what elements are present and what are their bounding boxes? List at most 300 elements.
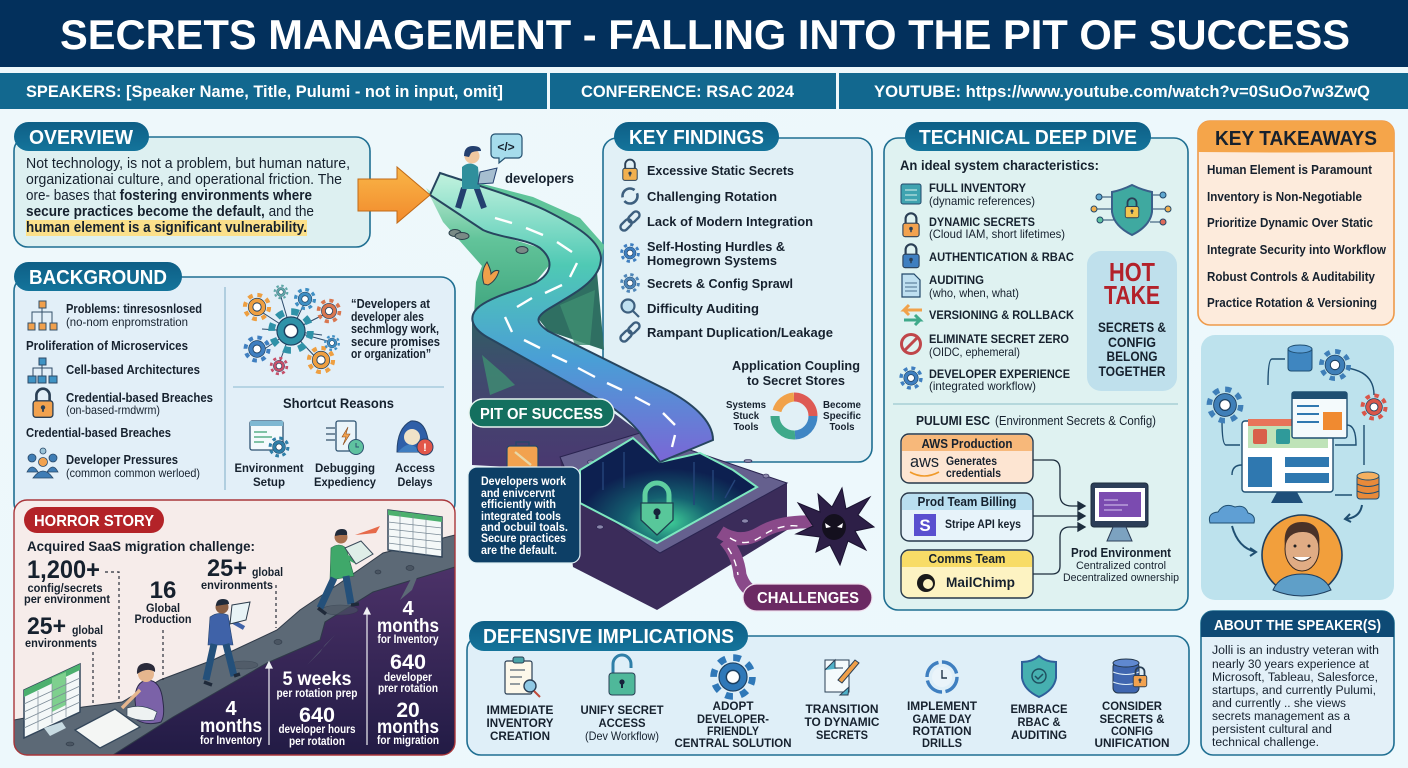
overview text: ore- bases that fostering environments where — [26, 188, 312, 204]
callout: hot take: BELONG — [1106, 348, 1158, 364]
icon: orange database — [1357, 472, 1379, 499]
item: auditing — [929, 273, 1019, 300]
icon: gear 2 — [622, 275, 638, 291]
text: microservices: Proliferation of Microservices — [26, 338, 188, 353]
takeaways list: Human Element is Paramount — [1207, 163, 1373, 177]
technical heading: TECHNICAL DEEP DIVE — [919, 127, 1137, 149]
finding 4: Self-Hosting Hurdles & — [647, 239, 785, 254]
challenge paths — [720, 522, 812, 592]
label: environment setup: Environment — [234, 461, 304, 475]
about text: startups, and currently Pulumi, — [1212, 685, 1376, 697]
text box: developers work: integrated tools — [481, 509, 561, 523]
stat: right column: developer — [384, 672, 432, 684]
figure: stairs climber — [318, 529, 373, 614]
arrows: timeline — [266, 608, 370, 745]
item: rbac: RBAC & — [1018, 715, 1061, 729]
text: credential breaches: (on-based-rmdwrm) — [66, 403, 160, 417]
stat: 16 production: Production — [134, 612, 192, 626]
finding 2: Challenging Rotation — [647, 189, 777, 204]
horror heading: HORROR STORY — [34, 513, 154, 530]
icon: document — [902, 274, 920, 297]
label: access delays: Delays — [398, 475, 433, 489]
title: SECRETS MANAGEMENT - FALLING INTO THE PIT OF SUCCESS — [60, 11, 1350, 58]
background heading: BACKGROUND — [29, 267, 167, 289]
item: auditing: (who, when, what) — [929, 286, 1019, 300]
item: game day — [907, 699, 978, 750]
item: unification: CONSIDER — [1102, 699, 1162, 713]
icon: monster — [796, 488, 874, 565]
panel: horror story — [14, 500, 455, 755]
item: unification: UNIFICATION — [1094, 736, 1170, 750]
panel: key takeaways — [1198, 121, 1394, 325]
icon: inventory — [901, 184, 921, 204]
text: problems: Problems: tinresosnlosed — [66, 301, 202, 316]
panel: speaker illustration — [1201, 335, 1394, 600]
stat: right column: months — [377, 717, 439, 738]
stat: 16 production — [134, 577, 192, 626]
label: prod environment: Centralized control — [1076, 560, 1166, 572]
speech bubble: </> — [497, 140, 515, 154]
callout: hot take — [1087, 251, 1177, 391]
text: subhead: Acquired SaaS migration challenge: — [27, 538, 255, 554]
heading: application coupling: Application Coupling — [732, 358, 860, 373]
road — [430, 173, 713, 462]
takeaways list: Inventory is Non-Negotiable — [1207, 190, 1362, 204]
item: transition: SECRETS — [816, 728, 868, 742]
item: immediate inventory: INVENTORY — [486, 716, 554, 730]
panel: key findings — [603, 122, 872, 462]
illustration: mountain path — [14, 535, 455, 755]
text: problems — [66, 301, 202, 329]
box: prod team billing: S — [919, 516, 931, 535]
icon: overlay window — [1292, 392, 1347, 438]
icon: dev gear — [901, 368, 921, 388]
item: full inventory: (dynamic references) — [929, 194, 1035, 208]
icon: open lock — [609, 655, 635, 695]
item: immediate inventory: CREATION — [490, 729, 550, 743]
text box: developers work: and enivcervnt — [481, 486, 555, 500]
stat: 1200 config — [24, 556, 110, 606]
stat: 1200 config: 1,200+ — [27, 556, 100, 584]
arrows to portrait — [1232, 505, 1362, 556]
text: quote: “Developers at — [351, 297, 431, 311]
item: developer experience — [929, 367, 1070, 393]
developer figure — [458, 146, 497, 208]
youtube bar: YOUTUBE: https://www.youtube.com/watch?v=0SuOo7w3ZwQ — [874, 82, 1370, 101]
item: auditing: AUDITING — [929, 273, 984, 287]
about text: technical challenge. — [1212, 737, 1319, 749]
label: systems stuck tools: Stuck — [733, 410, 759, 422]
item: dynamic secrets: DYNAMIC SECRETS — [929, 215, 1035, 229]
about text: persistent cultural and — [1212, 724, 1332, 736]
key findings heading — [614, 122, 779, 151]
item: adopt: DEVELOPER- — [697, 712, 769, 726]
stat: rotation prep — [276, 669, 358, 748]
icon: environment setup — [250, 421, 288, 456]
box: prod team billing: Prod Team Billing — [918, 494, 1017, 509]
item: immediate inventory — [486, 703, 554, 743]
stat: 25 global left: global — [72, 623, 103, 637]
item: rbac: EMBRACE — [1010, 702, 1068, 716]
arrows to prod — [1033, 460, 1085, 574]
item: unification: CONFIG — [1111, 724, 1153, 738]
horror heading — [24, 507, 164, 533]
label: systems stuck tools — [726, 399, 766, 433]
pit block — [560, 433, 787, 610]
stat: months inventory — [200, 698, 263, 747]
label: become specific tools: Become — [823, 399, 861, 411]
stat: rotation prep: 5 weeks — [282, 669, 352, 690]
callout: hot take: HOT — [1109, 257, 1155, 287]
stat: rotation prep: developer hours — [278, 724, 356, 736]
icon: org tree blue — [28, 358, 57, 383]
box: aws production: Generates — [946, 454, 997, 468]
stat: right column: prer rotation — [378, 683, 438, 695]
label: prod environment — [1063, 546, 1179, 584]
icon: access delays: ! — [423, 442, 427, 454]
icon: toolbox — [507, 442, 538, 470]
icon: gear — [622, 245, 638, 261]
item: rbac — [1010, 702, 1068, 742]
icon: rotation — [622, 188, 638, 204]
overview text: organizationai culture, and operational friction. The — [26, 172, 342, 188]
icon: orange lock — [903, 213, 919, 237]
callout: hot take: SECRETS & — [1098, 319, 1166, 335]
about text — [1212, 645, 1379, 749]
icon: database — [1288, 345, 1312, 371]
takeaways heading — [1198, 121, 1394, 152]
speakers bar — [0, 73, 547, 109]
icon: link — [619, 210, 641, 232]
item: transition: TO DYNAMIC — [804, 715, 880, 729]
text: developer pressures: (common common werloed) — [66, 466, 200, 480]
takeaways list: Integrate Security into Workflow — [1207, 243, 1386, 257]
takeaways list — [1207, 163, 1386, 310]
item: rbac: AUDITING — [1011, 728, 1067, 742]
icon: developers group — [27, 448, 58, 478]
portrait — [1262, 515, 1342, 596]
callout: hot take: TAKE — [1104, 280, 1160, 310]
defensive heading — [469, 621, 748, 651]
about text: and currently .. she views — [1212, 698, 1346, 710]
text: quote: sechmlogy work, — [351, 322, 439, 336]
cliff — [472, 316, 650, 470]
text: problems: (no-nom enpromstration — [66, 315, 188, 329]
label: debugging expediency: Debugging — [315, 461, 375, 475]
stat: 25 global right: global — [252, 565, 283, 579]
stat: right column: months — [377, 616, 439, 637]
item: game day: DRILLS — [922, 736, 962, 750]
item: versioning: VERSIONING & ROLLBACK — [929, 308, 1074, 322]
stat: rotation prep: per rotation prep — [276, 688, 358, 700]
icon: main monitor — [1242, 419, 1333, 503]
stat: 25 global right — [201, 555, 283, 592]
callout: hot take: TOGETHER — [1098, 363, 1166, 379]
about heading — [1201, 611, 1394, 637]
icon: cycle ring — [775, 397, 813, 435]
panel: defensive implications — [467, 621, 1189, 755]
stat: rotation prep: per rotation — [289, 736, 345, 748]
box: comms team: Comms Team — [928, 551, 1006, 566]
takeaways list: Robust Controls & Auditability — [1207, 270, 1375, 284]
item: secret zero — [929, 332, 1069, 359]
takeaways list: Practice Rotation & Versioning — [1207, 296, 1377, 310]
text box: developers work: and ocbuil toals. — [481, 520, 568, 534]
panel: overview — [14, 122, 370, 247]
pit of success heading: PIT OF SUCCESS — [480, 406, 603, 423]
text: credential breaches 2: Credential-based Breaches — [26, 425, 171, 440]
text box: developers work: Secure practices — [481, 531, 566, 545]
overview text: Not technology, is not a problem, but human nature, — [26, 156, 350, 172]
crack marks — [307, 570, 420, 665]
icon: spreadsheet monitor — [24, 664, 80, 738]
finding 1: Excessive Static Secrets — [647, 163, 794, 178]
item: adopt — [674, 699, 792, 750]
icon: spreadsheet top — [388, 510, 442, 557]
stat: 1200 config: per environment — [24, 592, 110, 606]
heading: application coupling — [732, 358, 860, 388]
stat: 16 production: Global — [146, 601, 180, 615]
heading: pulumi esc: (Environment Secrets & Config) — [995, 413, 1156, 428]
stat: months inventory: for Inventory — [200, 735, 263, 747]
icon: clipboard — [505, 657, 540, 697]
text box: developers work: efficiently with — [481, 497, 556, 511]
item: unify secret — [580, 703, 664, 743]
item: full inventory: FULL INVENTORY — [929, 181, 1026, 195]
illustration: dark chasm — [105, 567, 455, 755]
pit rocks — [588, 460, 769, 529]
about text: Microsoft, Tableau, Salesforce, — [1212, 672, 1378, 684]
icon: link 2 — [619, 321, 641, 343]
stat: 1200 config: config/secrets — [28, 581, 103, 595]
panel: technical deep dive — [884, 122, 1188, 610]
stat: 16 production: 16 — [150, 577, 176, 604]
item: unify secret: (Dev Workflow) — [585, 729, 659, 743]
item: unification: SECRETS & — [1100, 712, 1165, 726]
stat: right column: 4 — [402, 598, 414, 620]
text: developer pressures: Developer Pressures — [66, 452, 178, 467]
label: systems stuck tools: Tools — [734, 421, 759, 433]
pit hole — [580, 438, 757, 543]
icon: padlock — [33, 389, 53, 417]
label: become specific tools: Tools — [830, 421, 855, 433]
challenges heading — [743, 584, 872, 611]
item: transition — [804, 702, 880, 742]
icon: transition — [825, 660, 859, 695]
item: authentication: AUTHENTICATION & RBAC — [929, 250, 1074, 264]
text: credential breaches — [66, 390, 213, 417]
label: access delays: Access — [395, 461, 435, 475]
finding 4: Homegrown Systems — [647, 253, 777, 268]
icon: version arrows — [904, 305, 922, 325]
stat: 25 global right: 25+ — [207, 555, 247, 582]
item: full inventory — [929, 181, 1035, 208]
box: aws production — [901, 434, 1033, 483]
about heading: ABOUT THE SPEAKER(S) — [1214, 618, 1381, 634]
item: secret zero: ELIMINATE SECRET ZERO — [929, 332, 1069, 346]
ground rocks — [66, 566, 414, 746]
panel: background — [14, 262, 455, 517]
stat: months inventory: 4 — [225, 698, 237, 720]
panel: about the speaker — [1201, 611, 1394, 755]
item: secret zero: (OIDC, ephemeral) — [929, 345, 1020, 359]
label: environment setup — [234, 461, 304, 489]
icon: pit lock — [641, 483, 673, 535]
item: adopt: ADOPT — [712, 699, 754, 713]
stat: 25 global left — [25, 613, 103, 650]
rocks and plant — [449, 230, 528, 285]
item: unification — [1094, 699, 1170, 750]
conference bar: CONFERENCE: RSAC 2024 — [581, 82, 795, 101]
figure: seated developer — [122, 663, 164, 724]
key findings heading: KEY FINDINGS — [629, 127, 764, 149]
item: game day: ROTATION — [912, 724, 972, 738]
text box: developers work: Developers work — [481, 474, 566, 488]
stat: 25 global right: environments — [201, 578, 273, 592]
subheading: ideal system: An ideal system characteristics: — [900, 157, 1099, 173]
item: immediate inventory: IMMEDIATE — [486, 703, 554, 717]
label: become specific tools: Specific — [823, 410, 861, 422]
item: adopt: CENTRAL SOLUTION — [674, 736, 792, 750]
text: quote: or organization” — [351, 347, 431, 361]
stat: 25 global left: environments — [25, 636, 97, 650]
text box: developers work — [468, 467, 580, 563]
box: aws production: aws — [910, 452, 939, 471]
callout: hot take: CONFIG — [1108, 334, 1156, 350]
item: developer experience: (integrated workflow) — [929, 379, 1036, 393]
box: prod team billing — [901, 493, 1033, 541]
speech bubble — [491, 134, 522, 163]
icon: org tree orange — [28, 301, 57, 330]
item: dynamic secrets: (Cloud IAM, short lifetimes) — [929, 227, 1065, 241]
icon: prohibited — [902, 334, 920, 354]
finding 5: Secrets & Config Sprawl — [647, 276, 793, 291]
stat: right column: 20 — [396, 699, 420, 722]
stat: right column: for migration — [377, 735, 439, 747]
label: prod environment: Decentralized ownership — [1063, 572, 1179, 584]
overview heading — [14, 122, 149, 151]
item: unify secret: UNIFY SECRET — [580, 703, 664, 717]
challenges heading: CHALLENGES — [757, 590, 859, 607]
conference bar — [550, 73, 836, 109]
overview heading: OVERVIEW — [29, 127, 133, 149]
icon: static lock — [623, 160, 637, 180]
box: comms team — [901, 550, 1033, 598]
icon: gears — [1209, 351, 1386, 421]
heading: shortcut reasons: Shortcut Reasons — [283, 395, 394, 411]
finding 4 — [647, 239, 785, 268]
icon: clock rotation — [927, 662, 957, 692]
takeaways heading: KEY TAKEAWAYS — [1215, 128, 1377, 150]
box: comms team: MailChimp — [946, 574, 1015, 590]
about text: Jolli is an industry veteran with — [1212, 645, 1379, 657]
stat: rotation prep: 640 — [299, 704, 335, 727]
illustration: pit of success road — [358, 134, 874, 611]
item: adopt: FRIENDLY — [707, 724, 759, 738]
label: access delays — [395, 461, 435, 489]
heading: pulumi esc — [916, 413, 1156, 428]
label: debugging expediency: Expediency — [314, 475, 376, 489]
finding 3: Lack of Modern Integration — [647, 214, 813, 229]
item: developer experience: DEVELOPER EXPERIENCE — [929, 367, 1070, 381]
icon: access delays — [397, 421, 433, 455]
finding 6: Difficulty Auditing — [647, 301, 759, 316]
icon: prod monitor — [1091, 483, 1148, 541]
icon: cloud — [1209, 505, 1254, 523]
label: systems stuck tools: Systems — [726, 399, 766, 411]
icon: red paper plane — [355, 526, 380, 535]
icon: paper stack — [75, 709, 140, 748]
label: developers: developers — [505, 170, 574, 186]
label: environment setup: Setup — [253, 475, 285, 489]
pit of success heading — [469, 399, 614, 427]
icon: shield lock — [1091, 185, 1171, 235]
overview text: human element is a significant vulnerability. — [26, 220, 307, 236]
about text: nearly 30 years experience at — [1212, 659, 1370, 671]
stat: right column: 640 — [390, 651, 426, 674]
orange arrow — [358, 167, 430, 223]
item: game day: IMPLEMENT — [907, 699, 978, 713]
text: quote — [351, 297, 440, 361]
icon: shield check — [1022, 656, 1056, 697]
label: become specific tools — [823, 399, 861, 433]
youtube bar — [839, 73, 1408, 109]
text: quote: developer ales — [351, 310, 424, 324]
figure: laptop climber — [204, 599, 250, 685]
icon: gear shield — [714, 658, 752, 696]
green land — [426, 188, 552, 316]
box: aws production: AWS Production — [922, 436, 1013, 451]
stat: right column: for Inventory — [378, 634, 439, 646]
box: aws production: credentials — [946, 466, 1001, 480]
stat: 25 global left: 25+ — [27, 613, 66, 640]
heading: pulumi esc: PULUMI ESC — [916, 413, 991, 428]
item: dynamic secrets — [929, 215, 1065, 241]
text: developer pressures — [66, 452, 200, 480]
dashed leaders — [93, 572, 276, 706]
item: game day: GAME DAY — [912, 712, 972, 726]
pit hole details — [603, 452, 735, 505]
finding 7: Rampant Duplication/Leakage — [647, 325, 833, 340]
overview text — [26, 156, 350, 236]
icon: blue lock — [903, 244, 919, 268]
background heading — [14, 262, 182, 291]
box: prod team billing: Stripe API keys — [945, 517, 1021, 531]
defensive heading: DEFENSIVE IMPLICATIONS — [483, 626, 734, 648]
icon: database lock — [1113, 659, 1147, 693]
overview text: secure practices become the default, and the — [26, 204, 314, 220]
road dashes — [495, 218, 675, 447]
stat: right column — [377, 598, 439, 747]
heading: application coupling: to Secret Stores — [747, 373, 845, 388]
about text: secrets management as a — [1212, 711, 1351, 723]
takeaways list: Prioritize Dynamic Over Static — [1207, 216, 1373, 230]
label: prod environment: Prod Environment — [1071, 546, 1172, 560]
text: credential breaches: Credential-based Breaches — [66, 390, 213, 405]
icon: gear network — [245, 286, 340, 374]
text: architectures: Cell-based Architectures — [66, 362, 200, 377]
label: debugging expediency — [314, 461, 376, 489]
item: transition: TRANSITION — [806, 702, 878, 716]
text box: developers work: are the default. — [481, 543, 557, 557]
icon: debugging expediency — [326, 421, 364, 454]
icon: magnifier — [622, 300, 639, 317]
stat: months inventory: months — [200, 716, 262, 737]
title banner — [0, 0, 1408, 67]
item: unify secret: ACCESS — [598, 716, 646, 730]
text: quote: secure promises — [351, 335, 440, 349]
speakers bar: SPEAKERS: [Speaker Name, Title, Pulumi - not in input, omit] — [26, 82, 503, 101]
